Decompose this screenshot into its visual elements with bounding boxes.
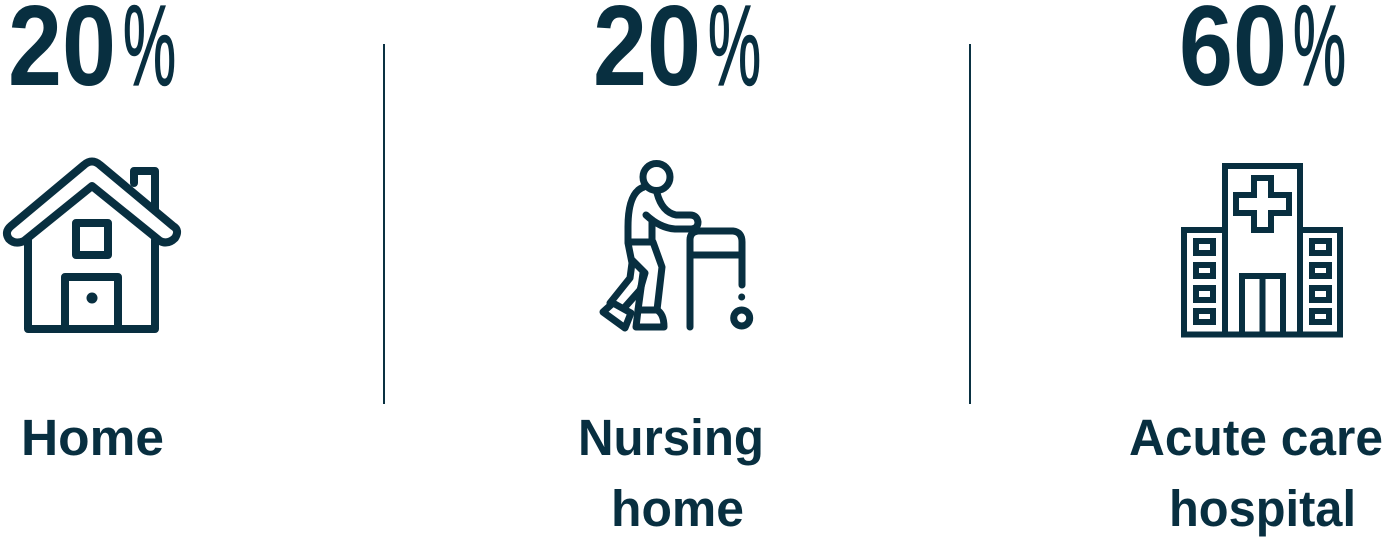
label: Nursing home — [578, 409, 764, 537]
panel: nursing home — [578, 0, 764, 537]
label: Home: Home — [21, 409, 164, 466]
label: Acute care hospital — [1129, 409, 1383, 537]
icon: hospital — [1184, 166, 1340, 334]
label: Nursing home: Nursing — [578, 409, 764, 466]
icon: person with walker — [603, 164, 750, 328]
label: Acute care hospital: hospital — [1169, 480, 1356, 537]
panel: acute care hospital — [1129, 0, 1383, 537]
icon: house — [7, 162, 177, 329]
panel: home — [7, 0, 177, 466]
label: Acute care hospital: Acute care — [1129, 409, 1383, 466]
label: Nursing home: home — [611, 480, 744, 537]
